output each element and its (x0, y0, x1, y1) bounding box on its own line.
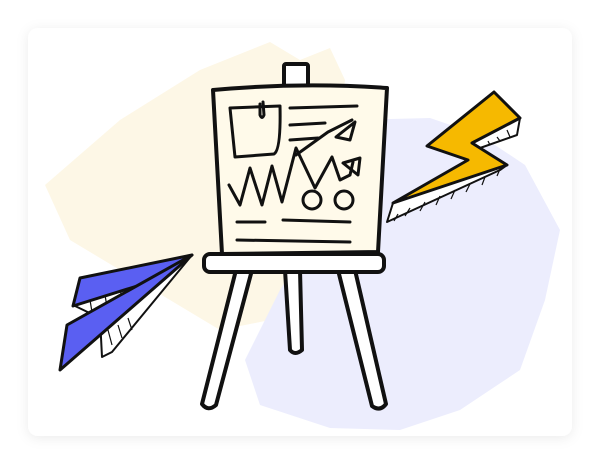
card (28, 28, 572, 436)
icon: paper plane (60, 255, 192, 370)
easel legs (202, 270, 386, 409)
easel board (204, 64, 387, 272)
background blob: yellow (45, 42, 345, 330)
background blob: lavender (245, 118, 560, 430)
icon: lightning bolt (387, 92, 520, 222)
